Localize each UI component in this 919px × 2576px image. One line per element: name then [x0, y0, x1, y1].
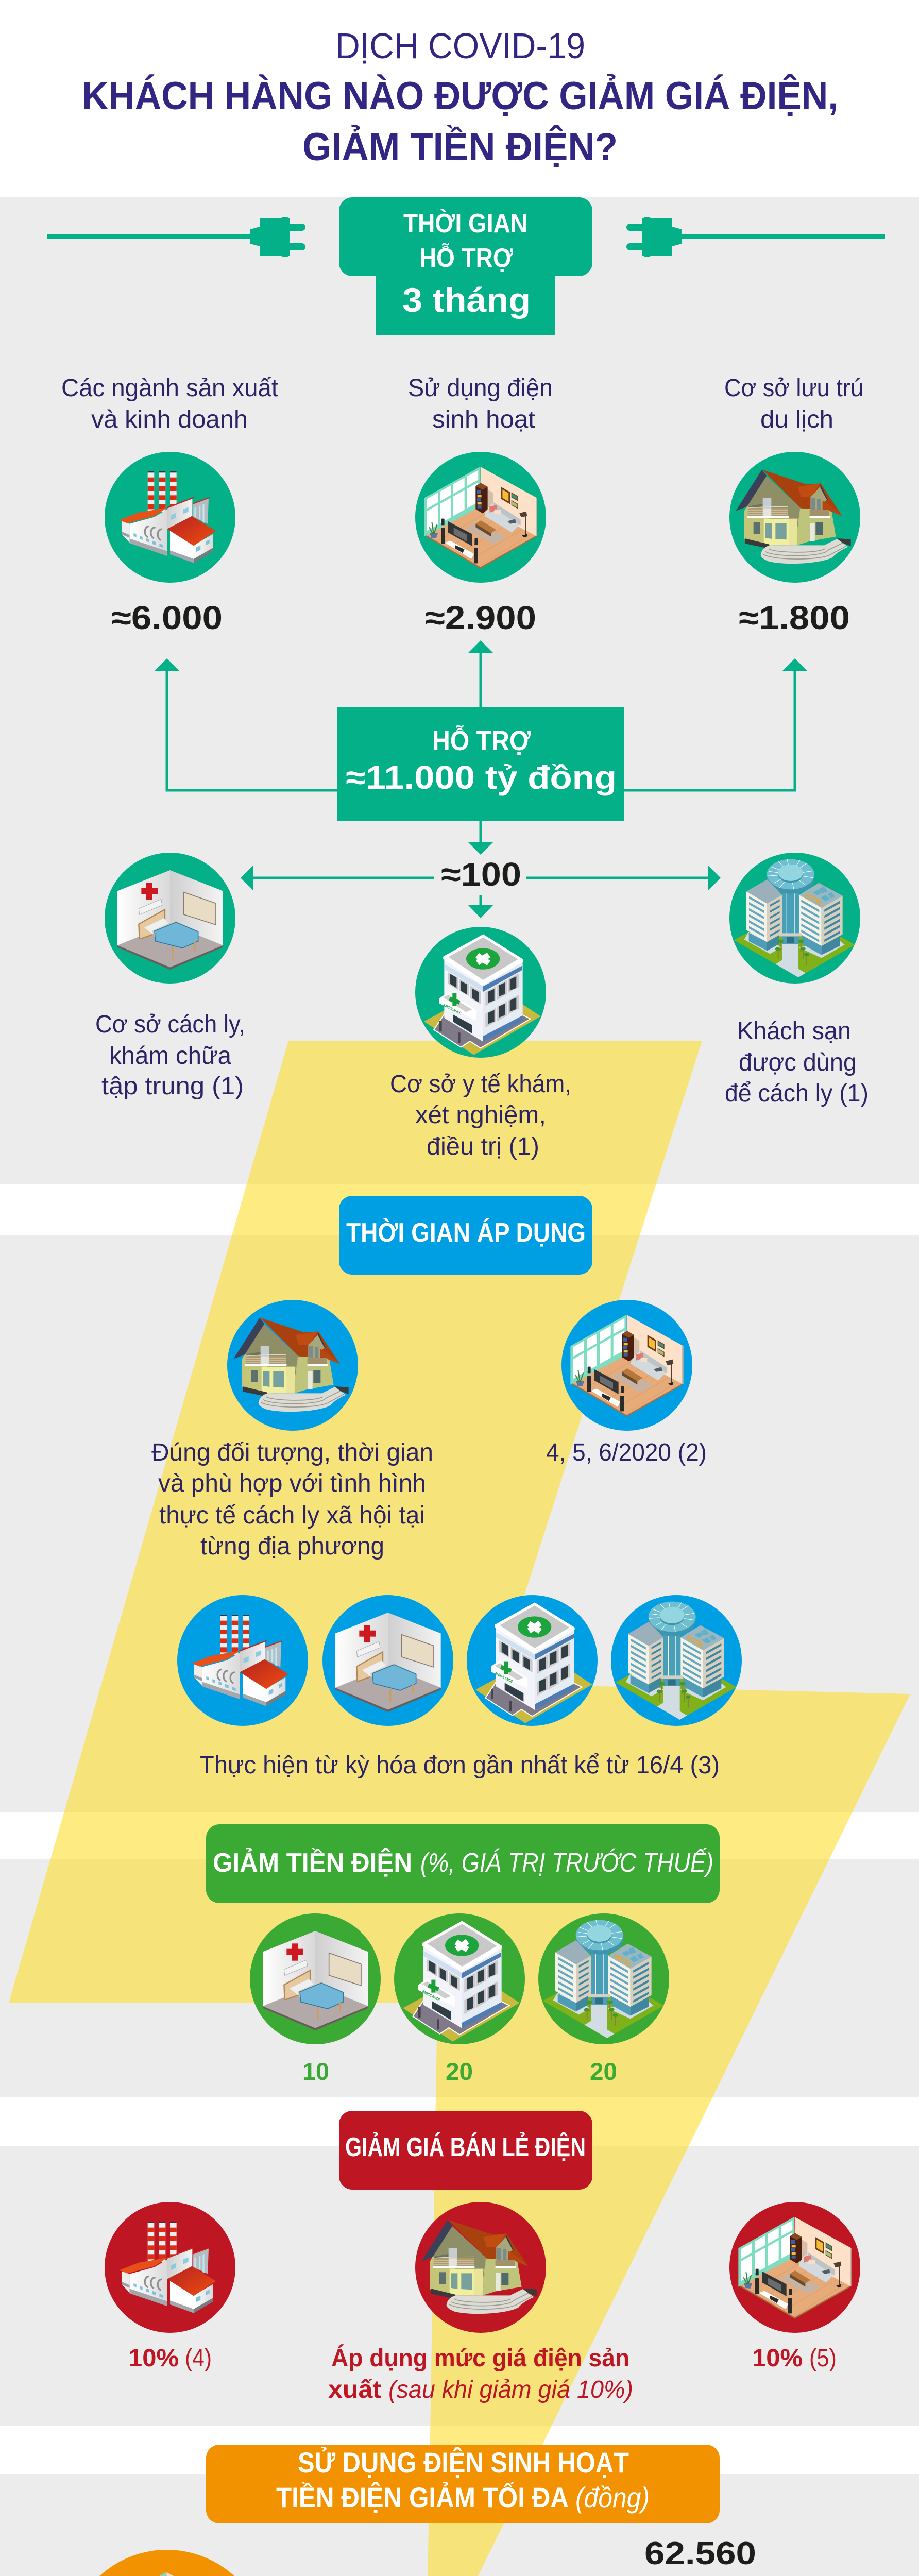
icon: living room on blue circle — [561, 1300, 692, 1431]
icon: hospital on green circle — [415, 927, 546, 1058]
icon: ward on green circle — [105, 853, 235, 984]
item: hospital 20 percent: 20 — [446, 2058, 473, 2085]
category: tourist accommodation — [724, 375, 863, 636]
heading: retail price reduction: GIẢM GIÁ BÁN LẺ ĐIỆN — [345, 2132, 586, 2162]
value about 100: ≈100 — [441, 856, 521, 893]
panel: retail price reduction background — [0, 2146, 919, 2426]
item: hospital 20 percent — [394, 1913, 525, 2085]
title — [82, 26, 838, 169]
icon: house on green circle — [729, 452, 860, 583]
category: hotels used for quarantine — [725, 853, 869, 1107]
category: manufacturing and business: ≈6.000 — [111, 599, 223, 636]
category: manufacturing and business: Các ngành sản xuất — [61, 375, 278, 402]
heading: household use maximum reduction: (đồng) — [575, 2481, 650, 2514]
heading: electricity bill reduction: (%, GIÁ TRỊ TRƯỚC THUẾ) — [420, 1848, 713, 1878]
text: accommodation application condition — [151, 1439, 433, 1560]
icon: left electric plug — [47, 217, 305, 257]
item: house production price — [328, 2202, 633, 2403]
heading: application time — [339, 1196, 592, 1275]
panel: household electricity background — [0, 2474, 919, 2576]
text: accommodation application condition: Đúng đối tượng, thời gian — [151, 1439, 433, 1466]
category: quarantine and treatment facilities: tập trung (1) — [101, 1073, 244, 1100]
category: manufacturing and business: và kinh doanh — [91, 406, 248, 433]
category: hotels used for quarantine: Khách sạn — [737, 1018, 851, 1045]
heading: retail price reduction — [339, 2111, 592, 2190]
text: household application months: 4, 5, 6/2020 (2) — [546, 1439, 707, 1466]
panel: application time background — [0, 1235, 919, 1812]
item: house production price: xuất — [328, 2376, 381, 2403]
icon: right electric plug — [626, 217, 885, 257]
heading: application time: THỜI GIAN ÁP DỤNG — [346, 1218, 586, 1248]
item: ward 10 percent — [250, 1913, 381, 2085]
item: room 10 percent: (5) — [809, 2345, 837, 2372]
badge: support period 3 months: HỖ TRỢ — [419, 243, 514, 273]
category: hotels used for quarantine: để cách ly (1) — [725, 1080, 869, 1107]
heading: electricity bill reduction: GIẢM TIỀN ĐIỆN — [213, 1848, 412, 1878]
box: support about 11,000 billion dong: ≈11.000 tỷ đồng — [346, 759, 617, 796]
category: quarantine and treatment facilities: Cơ sở cách ly, — [95, 1011, 245, 1038]
category: tourist accommodation: ≈1.800 — [739, 599, 850, 636]
lightning bolt background shape — [9, 1041, 910, 2576]
icon: hotel on blue circle — [611, 1595, 742, 1726]
category: household use: sinh hoạt — [432, 406, 535, 433]
heading: household use maximum reduction: TIỀN ĐIỆN GIẢM TỐI ĐA — [276, 2481, 569, 2514]
icon: factory on blue circle — [177, 1595, 308, 1726]
icon: hospital on blue circle — [467, 1595, 598, 1726]
icon: factory on green circle — [105, 452, 235, 583]
text: accommodation application condition: và phù hợp với tình hình — [158, 1470, 426, 1497]
arrows from support box — [154, 640, 808, 855]
category: quarantine and treatment facilities: khám chữa — [109, 1042, 231, 1070]
category: medical facilities: xét nghiệm, — [415, 1101, 546, 1129]
box: support about 11,000 billion dong — [337, 707, 624, 821]
category: household use: Sử dụng điện — [408, 375, 553, 402]
item: room 10 percent — [729, 2202, 860, 2372]
icon: hotel on green circle — [729, 853, 860, 984]
bar over 200 kWh: 62.560 — [644, 2536, 756, 2571]
text: nearest bill from 16/4: Thực hiện từ kỳ hóa đơn gần nhất kể từ 16/4 (3) — [199, 1752, 720, 1779]
category: manufacturing and business — [61, 375, 278, 636]
icon: living room on green circle — [415, 452, 546, 583]
heading: household use maximum reduction: SỬ DỤNG ĐIỆN SINH HOẠT — [298, 2446, 629, 2479]
item: factory 10 percent: 10% — [128, 2345, 179, 2372]
icon: living room on orange circle — [67, 2550, 266, 2576]
subtitle: DỊCH COVID-19 — [335, 26, 585, 66]
text: accommodation application condition: thực tế cách ly xã hội tại — [159, 1502, 425, 1529]
item: factory 10 percent — [105, 2202, 235, 2372]
badge: support period 3 months: 3 tháng — [402, 281, 531, 319]
category: medical facilities: Cơ sở y tế khám, — [390, 1071, 571, 1098]
category: medical facilities: điều trị (1) — [427, 1133, 539, 1160]
title line 2: GIẢM TIỀN ĐIỆN? — [302, 125, 618, 169]
icon row on blue circles — [177, 1595, 742, 1726]
icon: ward on blue circle — [322, 1595, 453, 1726]
category: medical facilities — [390, 927, 571, 1160]
arrows from about 100 — [241, 866, 721, 918]
item: house production price: Áp dụng mức giá điện sản — [331, 2344, 629, 2372]
panel: support period and amount background — [0, 197, 919, 1184]
icon: house on blue circle — [227, 1300, 358, 1431]
item: hotel 20 percent — [538, 1913, 669, 2085]
category: quarantine and treatment facilities — [95, 853, 245, 1100]
panel: bill reduction background — [0, 1859, 919, 2097]
title line 1: KHÁCH HÀNG NÀO ĐƯỢC GIẢM GIÁ ĐIỆN, — [82, 74, 838, 118]
item: hotel 20 percent: 20 — [590, 2058, 617, 2085]
badge: support period 3 months: THỜI GIAN — [403, 209, 527, 239]
badge: support period 3 months — [339, 197, 592, 335]
category: tourist accommodation: Cơ sở lưu trú — [724, 375, 863, 402]
heading: household use maximum reduction — [206, 2445, 720, 2523]
category: tourist accommodation: du lịch — [760, 406, 833, 433]
heading: electricity bill reduction — [206, 1824, 720, 1903]
category: hotels used for quarantine: được dùng — [739, 1049, 857, 1076]
item: room 10 percent: 10% — [752, 2345, 803, 2372]
category: household use — [408, 375, 553, 636]
text: accommodation application condition: từng địa phương — [200, 1533, 384, 1560]
category: household use: ≈2.900 — [425, 599, 536, 636]
item: house production price: (sau khi giảm giá 10%) — [388, 2376, 633, 2403]
box: support about 11,000 billion dong: HỖ TRỢ — [432, 725, 531, 756]
item: ward 10 percent: 10 — [302, 2058, 329, 2085]
item: factory 10 percent: (4) — [185, 2345, 212, 2372]
